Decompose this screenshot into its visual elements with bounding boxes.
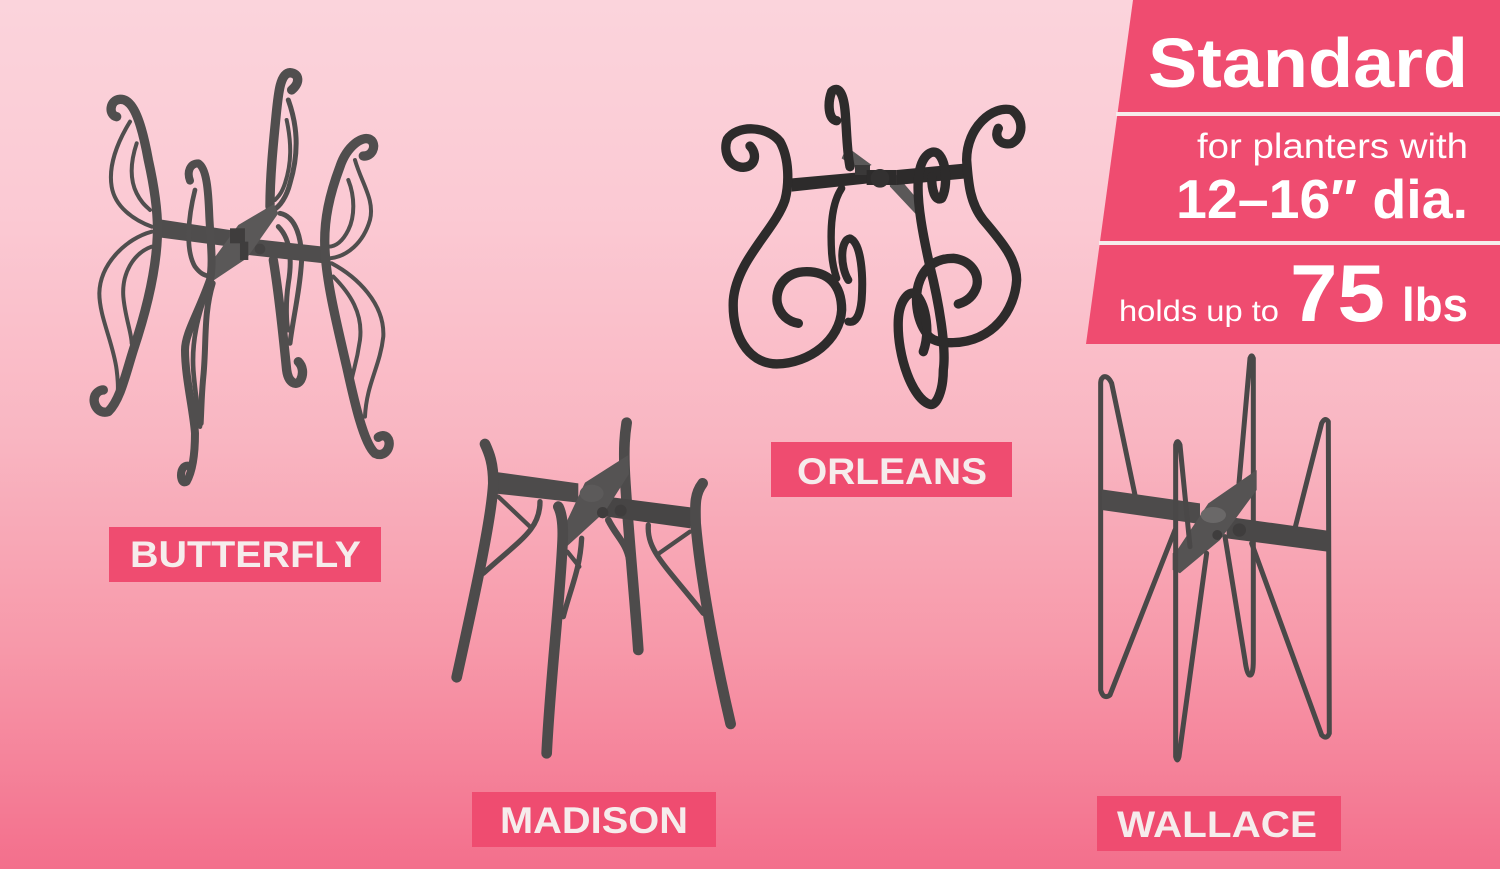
label: BUTTERFLY [109, 527, 381, 582]
label: MADISON: MADISON [500, 800, 688, 841]
text: holds up to: holds up to [1119, 295, 1279, 328]
text: for planters with: for planters with [1197, 127, 1468, 166]
text: diameter range: 12–16″ dia. [1176, 168, 1468, 230]
label: ORLEANS: ORLEANS [797, 451, 987, 492]
label: BUTTERFLY: BUTTERFLY [130, 534, 361, 575]
label: MADISON [472, 792, 716, 847]
number: 75: 75 [1290, 249, 1385, 339]
label: WALLACE [1097, 796, 1341, 851]
icon: butterfly stand [94, 73, 389, 482]
icon: orleans stand [726, 89, 1021, 405]
heading: Standard: Standard [1148, 24, 1468, 102]
icon: wallace stand [1101, 356, 1329, 760]
label: ORLEANS [771, 442, 1012, 497]
label: WALLACE: WALLACE [1117, 804, 1317, 845]
panel: product specs [1086, 0, 1500, 344]
text: lbs: lbs [1402, 278, 1468, 331]
icon: madison stand [457, 423, 731, 753]
